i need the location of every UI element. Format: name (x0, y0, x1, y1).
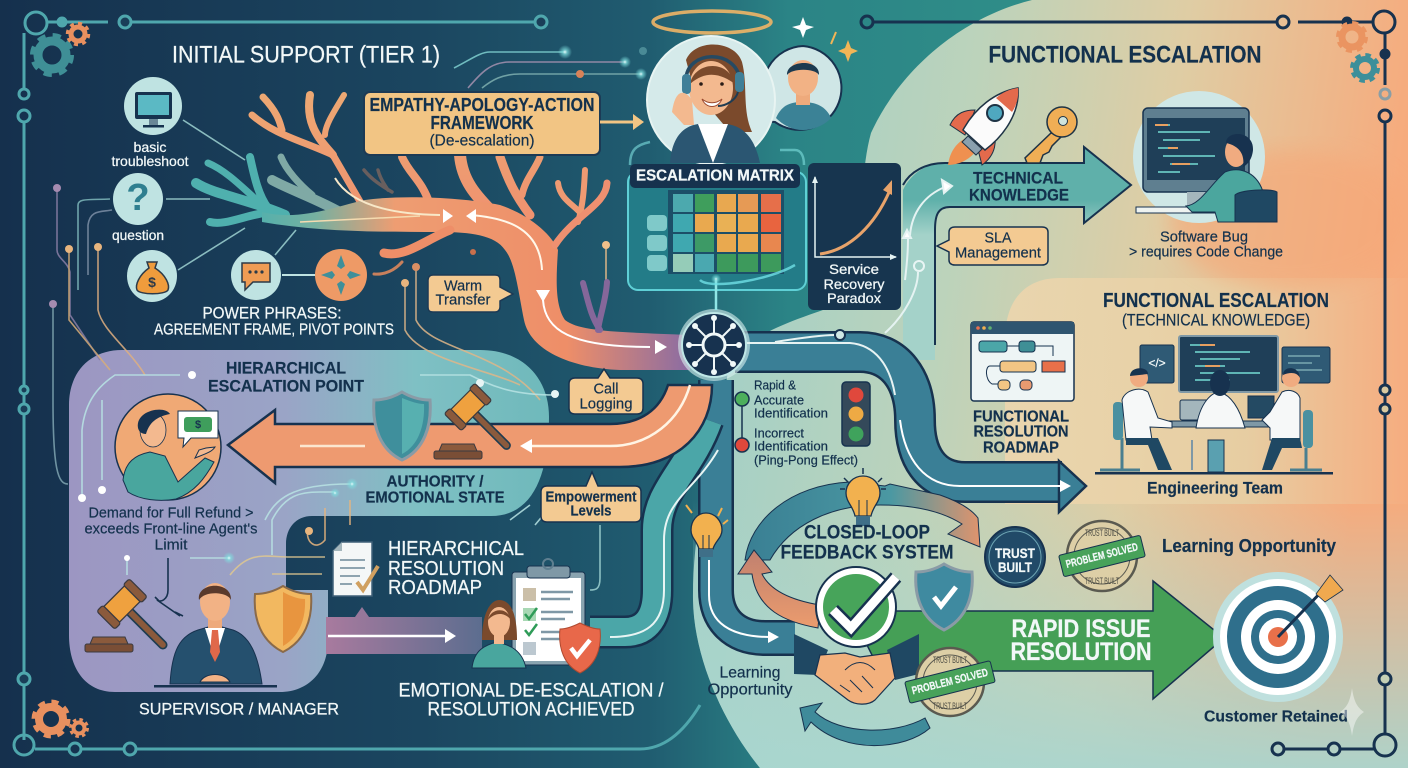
icon: chat bubble (231, 250, 281, 300)
arrow: technical knowledge: KNOWLEDGE (969, 186, 1069, 204)
label: authority emotional state: EMOTIONAL STATE (366, 490, 505, 506)
arrow: closed loop top (745, 482, 980, 560)
hub node (678, 274, 750, 381)
label: functional resolution roadmap (973, 408, 1069, 456)
label: supervisor manager: SUPERVISOR / MANAGER (139, 700, 339, 718)
label: hierarchical escalation point: HIERARCHICAL (226, 358, 346, 378)
icon: clipboard (512, 559, 585, 665)
label: authority emotional state (366, 474, 505, 506)
icon: gavel lower (97, 579, 179, 661)
callout: empowerment levels: Levels (570, 502, 612, 520)
icon: gears top left (33, 24, 88, 74)
legend: identification outcomes: Identification (754, 406, 828, 420)
callout: warm transfer: Warm (444, 278, 482, 294)
badge: problem solved stamp bottom: PROBLEM SOLVED (911, 667, 989, 697)
badge: problem solved stamp top: TRUST BUILT (1085, 528, 1119, 538)
icon: shield teal (374, 392, 430, 460)
label: functional escalation technical knowledge: (TECHNICAL KNOWLEDGE) (1122, 310, 1310, 330)
badge: trust built (985, 527, 1045, 587)
legend: identification outcomes (735, 378, 858, 468)
legend: identification outcomes: Incorrect (754, 426, 804, 440)
callout: empathy apology action (364, 92, 644, 155)
callout: empathy apology action: (De-escalation) (430, 132, 534, 150)
icon: lightbulb left (686, 505, 728, 557)
icon: lightbulb top (840, 468, 886, 526)
label: power phrases: AGREEMENT FRAME, PIVOT POINTS (154, 322, 394, 338)
icon: handshake (794, 634, 919, 704)
arrow: closed loop bottom (800, 703, 930, 746)
label: hierarchical escalation point (208, 358, 365, 396)
label: power phrases (154, 304, 394, 338)
label: power phrases: POWER PHRASES: (202, 304, 342, 322)
thin lines: hub to technical arrow (700, 180, 952, 342)
right branches (558, 183, 582, 215)
icon: red shield check (560, 623, 600, 673)
legend: identification outcomes: Identification (754, 438, 828, 454)
label: software bug (1129, 228, 1283, 260)
icon: shield orange (255, 586, 311, 652)
icon: basic troubleshoot (124, 77, 182, 135)
arrow: hierarchical escalation (228, 385, 712, 483)
badge: trust built: TRUST (995, 545, 1035, 561)
label: learning opportunity left (708, 664, 792, 698)
icon: money bag: $ (148, 274, 156, 290)
label: hierarchical escalation point: ESCALATION POINT (208, 376, 365, 396)
icon: customer bubble (761, 46, 841, 130)
traffic light (842, 382, 870, 446)
label: hierarchical resolution roadmap: HIERARCHICAL (388, 538, 524, 560)
legend: identification outcomes: Rapid & (754, 378, 796, 392)
label: learning opportunity right: Learning Opportunity (1162, 536, 1336, 556)
label: engineering team: Engineering Team (1147, 478, 1283, 498)
callout: warm transfer (428, 275, 513, 312)
icon: sound block upper (434, 444, 482, 459)
badge: problem solved stamp top (1059, 521, 1145, 591)
glowing circuit nodes (49, 45, 647, 308)
panel: service recovery paradox (808, 163, 901, 310)
icon: roadmap window (971, 322, 1074, 401)
icon: engineering team: </> (1148, 356, 1166, 370)
label: learning opportunity left: Learning (720, 664, 780, 682)
orange upper branches (252, 95, 540, 215)
icon: sparkles (792, 17, 858, 62)
escalation matrix panel (628, 142, 806, 290)
teal branches (196, 157, 285, 223)
thin lines around hierarchical panel (82, 375, 600, 590)
escalation matrix panel: ESCALATION MATRIX (636, 168, 794, 184)
icon: engineering team (1095, 336, 1333, 474)
frame: left top circuit lines (14, 12, 700, 755)
band: to functional resolution arrow (735, 343, 1086, 512)
icon: shield check (916, 564, 972, 630)
callout: SLA management: SLA (984, 230, 1012, 246)
label: hierarchical resolution roadmap: ROADMAP (388, 577, 482, 599)
arrow: purple resolution band (326, 607, 482, 654)
tree of escalation paths (196, 95, 690, 370)
label: software bug: > requires Code Change (1129, 244, 1283, 260)
panel: service recovery paradox: Recovery (824, 276, 884, 292)
badge: problem solved stamp bottom: TRUST BUILT (933, 655, 967, 665)
icon: money bag (127, 250, 177, 302)
icon: roadmap document (333, 542, 378, 596)
white flow arrows on tree (300, 178, 667, 354)
arrow: demand to supervisor (155, 558, 183, 616)
label: authority emotional state: AUTHORITY / (386, 474, 484, 490)
icon: agent (647, 36, 775, 164)
icon: supervisor (154, 583, 277, 688)
title: initial support: INITIAL SUPPORT (TIER 1) (172, 42, 440, 68)
callout: call logging: Call (594, 380, 618, 398)
icon: key (1025, 107, 1077, 163)
label: functional resolution roadmap: RESOLUTION (974, 424, 1068, 440)
label: learning opportunity left: Opportunity (708, 682, 792, 698)
arrow: rapid issue resolution: RAPID ISSUE (1012, 615, 1150, 643)
callout: empathy apology action: FRAMEWORK (430, 113, 534, 133)
callout: empathy apology action: EMPATHY-APOLOGY-ACTION (370, 95, 594, 115)
icon: developer at computer (1133, 91, 1277, 223)
callout: call logging (569, 369, 643, 414)
lower panel teal tint (693, 500, 1408, 768)
icon: woman (472, 600, 526, 668)
label: demand for full refund (84, 504, 258, 554)
label: functional resolution roadmap: ROADMAP (983, 440, 1059, 456)
callout: warm transfer: Transfer (436, 292, 490, 308)
badge: trust built: BUILT (998, 559, 1032, 575)
soft light glow (1170, 150, 1408, 290)
label: demand for full refund: exceeds Front-line Agent's (84, 520, 258, 538)
faded branch (364, 170, 392, 192)
band: to closed loop (709, 380, 795, 643)
arrow: closed loop left (738, 550, 820, 628)
label: emotional de-escalation: RESOLUTION ACHIEVED (428, 700, 634, 720)
icon: customer demanding refund: $ (195, 419, 201, 431)
badge: problem solved stamp top: TRUST BUILT (1085, 576, 1119, 586)
callout: SLA management: Management (955, 244, 1042, 262)
frame: right circuit lines (861, 11, 1396, 756)
halo (653, 11, 771, 33)
label: demand for full refund: Demand for Full Refund > (88, 504, 254, 522)
label: hierarchical resolution roadmap: RESOLUTION (388, 558, 504, 580)
arrow: technical knowledge (903, 147, 1131, 360)
icon: target (1213, 572, 1343, 702)
callout: SLA management (937, 227, 1048, 265)
panel: functional escalation background (693, 0, 1408, 768)
arrow: rapid issue resolution: RESOLUTION (1010, 638, 1152, 666)
grey-teal branches (272, 157, 345, 215)
label: hierarchical resolution roadmap (388, 538, 524, 599)
label: closed-loop feedback system: CLOSED-LOOP (804, 522, 930, 544)
label: functional escalation technical knowledge: FUNCTIONAL ESCALATION (1103, 290, 1329, 312)
thin circuit lines left (53, 52, 640, 484)
icon: question (113, 173, 163, 225)
callout: empowerment levels: Empowerment (546, 488, 636, 506)
glowing nodes in panel (78, 371, 559, 564)
label: demand for full refund: Limit (154, 536, 188, 554)
label: customer retained: Customer Retained (1204, 708, 1348, 726)
panel: functional escalation team (1005, 278, 1408, 504)
badge: problem solved stamp bottom: TRUST BUILT (933, 701, 967, 711)
label: emotional de-escalation: EMOTIONAL DE-ESCALATION / (398, 680, 664, 702)
icon: gavel upper (444, 383, 522, 461)
callout: empowerment levels (541, 472, 641, 522)
title: functional escalation: FUNCTIONAL ESCALATION (988, 42, 1262, 68)
purple branch (583, 282, 607, 330)
main trunk (262, 197, 690, 370)
arrow: rapid issue resolution (850, 581, 1224, 699)
panel: lavender hierarchical escalation (69, 350, 549, 692)
panel: service recovery paradox: Paradox (827, 290, 881, 306)
label: basic troubleshoot: troubleshoot (112, 153, 189, 169)
callout: call logging: Logging (580, 396, 632, 412)
band: teal resolution (590, 420, 718, 637)
icon: rocket (948, 88, 1018, 165)
icon: pivot diamond (282, 249, 367, 301)
label: question: question (112, 227, 164, 243)
icon: sound block lower (85, 637, 133, 652)
icon: large green check (816, 567, 896, 647)
label: closed-loop feedback system: FEEDBACK SYSTEM (780, 542, 954, 564)
icon: gears bottom left (34, 702, 88, 736)
panel: service recovery paradox: Service (829, 261, 879, 277)
label: basic troubleshoot (112, 139, 189, 169)
arrow: technical knowledge: TECHNICAL (973, 168, 1063, 188)
legend: identification outcomes: (Ping-Pong Effect) (754, 452, 858, 468)
label: closed-loop feedback system (780, 522, 954, 564)
label: emotional de-escalation (398, 680, 664, 720)
label: functional escalation technical knowledge (1103, 290, 1329, 330)
badge: problem solved stamp bottom (905, 648, 995, 716)
label: software bug: Software Bug (1160, 228, 1248, 246)
decorative sparkle (1340, 688, 1364, 736)
label: functional resolution roadmap: FUNCTIONAL (973, 408, 1069, 426)
legend: identification outcomes: Accurate (754, 392, 804, 408)
label: basic troubleshoot: basic (134, 139, 166, 155)
icon: gears top right (1338, 23, 1378, 81)
icon: question: ? (126, 177, 150, 219)
icon: customer demanding refund (115, 394, 221, 500)
badge: problem solved stamp top: PROBLEM SOLVED (1065, 541, 1139, 571)
